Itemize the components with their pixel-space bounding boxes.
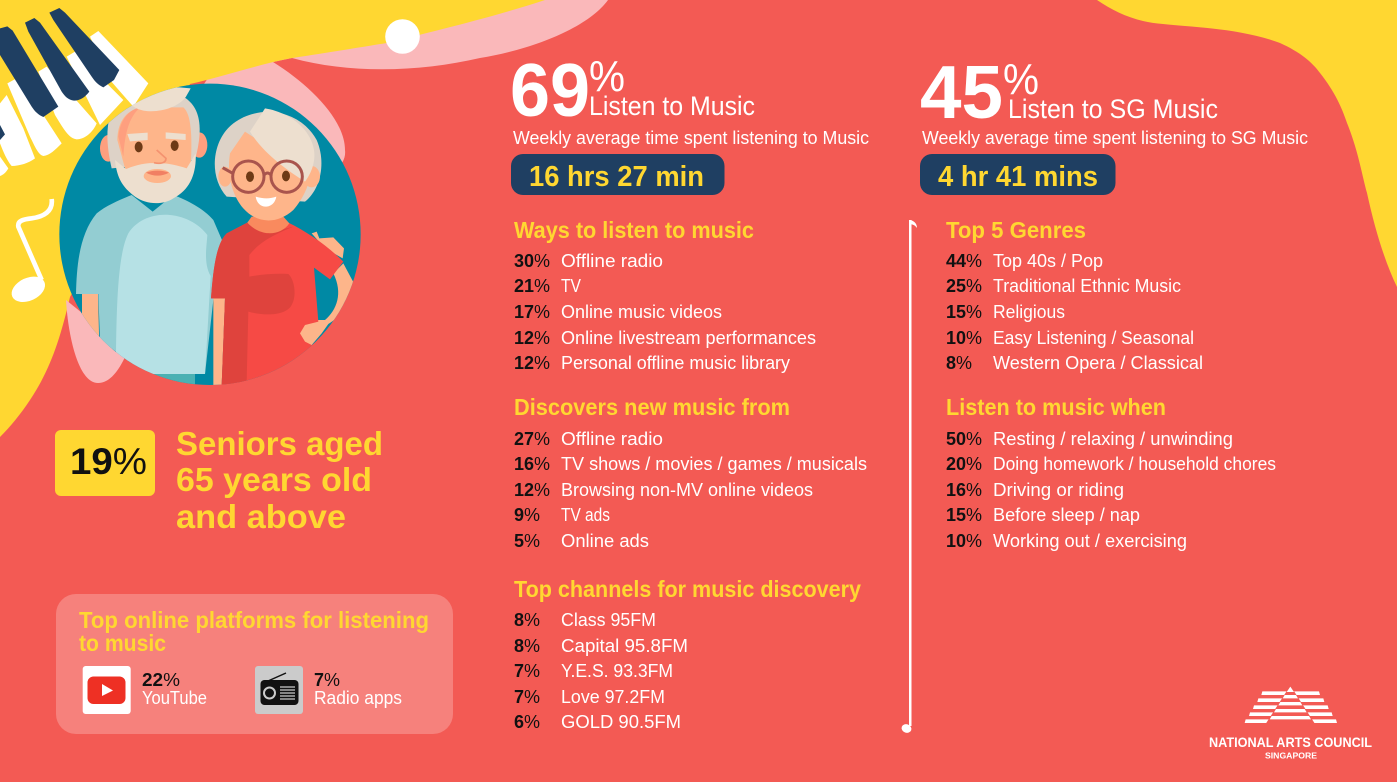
list: 10% [946, 531, 982, 551]
stat: 45% listen to SG music: % [1003, 55, 1039, 104]
stat: 45% listen to SG music: 45 [920, 50, 1003, 134]
background blob: pink top [200, 0, 608, 170]
heading: Top 5 Genres [946, 217, 1086, 243]
list: 8% [514, 610, 540, 630]
list: 15% [946, 505, 982, 525]
section: listen to music when [946, 394, 1276, 551]
list: 9% [514, 505, 540, 525]
icon: music note [8, 199, 52, 307]
list: Love 97.2FM [561, 687, 665, 707]
list [946, 251, 1203, 373]
list: TV [561, 276, 581, 296]
list: 12% [514, 353, 550, 373]
man: nose [154, 150, 166, 163]
list: 21% [514, 276, 550, 296]
list: 10% [946, 328, 982, 348]
pill: 16 hrs 27 min [511, 154, 724, 195]
list: 7% [514, 661, 540, 681]
man: hair top [132, 87, 191, 112]
stat: YouTube 22%: 22% [142, 670, 180, 690]
section: discovers new music from [514, 394, 867, 551]
stat: Radio apps 7%: Radio apps [314, 688, 402, 708]
man: shirt [76, 195, 223, 374]
panel heading [79, 607, 429, 656]
list: Personal offline music library [561, 353, 790, 373]
list [514, 429, 867, 551]
illustration: senior couple in teal circle [59, 84, 361, 386]
stat badge [55, 430, 155, 496]
list: 17% [514, 302, 550, 322]
list: Online music videos [561, 302, 722, 322]
icon: YouTube [83, 666, 131, 714]
list: 8% [946, 353, 972, 373]
stat: 69% listen to music: % [589, 52, 625, 101]
man: eyebrows and eyes [127, 132, 186, 141]
list: Doing homework / household chores [993, 454, 1276, 474]
woman: collar [247, 217, 289, 233]
woman: hand on shoulder [312, 232, 344, 258]
list: 27% [514, 429, 550, 449]
woman: face [229, 132, 310, 220]
heading: seniors aged 65 years old and above [176, 425, 383, 535]
stat: YouTube 22%: YouTube [142, 688, 207, 708]
list: Easy Listening / Seasonal [993, 328, 1194, 348]
man: ears [100, 132, 207, 162]
list: 16% [946, 480, 982, 500]
logo mark [1245, 685, 1337, 723]
logo subtext: SINGAPORE [1265, 750, 1317, 760]
text: weekly average SG music: Weekly average time spent listening to SG Music [922, 128, 1308, 148]
list: Top 40s / Pop [993, 251, 1103, 271]
list: 6% [514, 712, 540, 732]
stat: 69% listen to music: Listen to Music [589, 91, 755, 121]
woman: eyes [246, 171, 254, 182]
list: Before sleep / nap [993, 505, 1140, 525]
stat badge: 19% [70, 441, 147, 482]
list: Working out / exercising [993, 531, 1187, 551]
heading: seniors aged 65 years old and above: Seniors aged [176, 425, 383, 462]
stat: 19% seniors [55, 425, 383, 535]
list: 12% [514, 328, 550, 348]
stat: 45% listen to SG music: Listen to SG Music [1008, 94, 1218, 124]
section: top channels for music discovery [514, 576, 861, 732]
list: 44% [946, 251, 982, 271]
list: 15% [946, 302, 982, 322]
logo: National Arts Council Singapore [1209, 685, 1372, 760]
list: 7% [514, 687, 540, 707]
list: Resting / relaxing / unwinding [993, 429, 1233, 449]
list: Online ads [561, 531, 649, 551]
list: 25% [946, 276, 982, 296]
man: trousers [154, 374, 195, 384]
woman: glasses [223, 161, 302, 192]
list [514, 610, 688, 732]
panel heading: Top online platforms for listening [79, 607, 429, 633]
pill: 16 hrs 27 min: 16 hrs 27 min [529, 161, 704, 193]
decorative white dot [385, 19, 420, 54]
list: 5% [514, 531, 540, 551]
woman: hand at waist [300, 320, 328, 345]
panel: top online platforms [56, 594, 453, 734]
section: top 5 genres [946, 217, 1203, 373]
list: 12% [514, 480, 550, 500]
icon: radio [255, 666, 303, 714]
woman: smile [256, 197, 276, 207]
heading: seniors aged 65 years old and above: and above [176, 498, 346, 535]
text: weekly average music: Weekly average time spent listening to Music [513, 128, 869, 148]
pill: 4 hr 41 mins: 4 hr 41 mins [938, 161, 1098, 193]
list: TV shows / movies / games / musicals [561, 454, 867, 474]
heading: Ways to listen to music [514, 217, 754, 243]
list: 50% [946, 429, 982, 449]
list: Y.E.S. 93.3FM [561, 661, 673, 681]
list: 30% [514, 251, 550, 271]
stat: 45% listen to SG music [920, 50, 1218, 134]
panel heading: to music [79, 630, 166, 656]
list: 20% [946, 454, 982, 474]
list: Capital 95.8FM [561, 636, 688, 656]
stat: Radio apps 7%: 7% [314, 670, 340, 690]
background blob: yellow top left [0, 0, 545, 437]
list: Religious [993, 302, 1065, 322]
woman: shirt [211, 223, 343, 386]
stat: Radio apps 7% [314, 670, 402, 708]
pill: 4 hr 41 mins [920, 154, 1116, 195]
man: beard [115, 153, 196, 203]
list [514, 251, 816, 373]
heading: Top channels for music discovery [514, 576, 861, 602]
man: face [117, 107, 192, 169]
woman: hair back [215, 112, 321, 202]
list: 8% [514, 636, 540, 656]
stat: 69% listen to music [510, 48, 755, 132]
list: 16% [514, 454, 550, 474]
list: Browsing non-MV online videos [561, 480, 813, 500]
heading: Listen to music when [946, 394, 1166, 420]
list [946, 429, 1276, 551]
logo wordmark: NATIONAL ARTS COUNCIL [1209, 734, 1372, 750]
heading: seniors aged 65 years old and above: 65 years old [176, 461, 372, 498]
list: Online livestream performances [561, 328, 816, 348]
background blob: yellow top right [1097, 0, 1397, 287]
list: TV ads [561, 505, 610, 525]
man: hair sides [107, 97, 200, 168]
list: Offline radio [561, 429, 663, 449]
man: shirt front [116, 215, 211, 374]
background blob: pink lower left [66, 300, 128, 383]
list: Western Opera / Classical [993, 353, 1203, 373]
woman: hair fringe [250, 108, 314, 182]
man: arm [82, 294, 100, 336]
section: ways to listen to music [514, 217, 816, 373]
list: Driving or riding [993, 480, 1124, 500]
list: Traditional Ethnic Music [993, 276, 1181, 296]
list: GOLD 90.5FM [561, 712, 681, 732]
list: Class 95FM [561, 610, 656, 630]
woman: arm [317, 263, 354, 325]
man: mouth [144, 169, 171, 183]
decorative music note divider [900, 220, 917, 734]
list: Offline radio [561, 251, 663, 271]
stat: YouTube 22% [142, 670, 207, 708]
heading: Discovers new music from [514, 394, 790, 420]
stat: 69% listen to music: 69 [510, 48, 590, 132]
icon: piano keys [0, 8, 148, 176]
